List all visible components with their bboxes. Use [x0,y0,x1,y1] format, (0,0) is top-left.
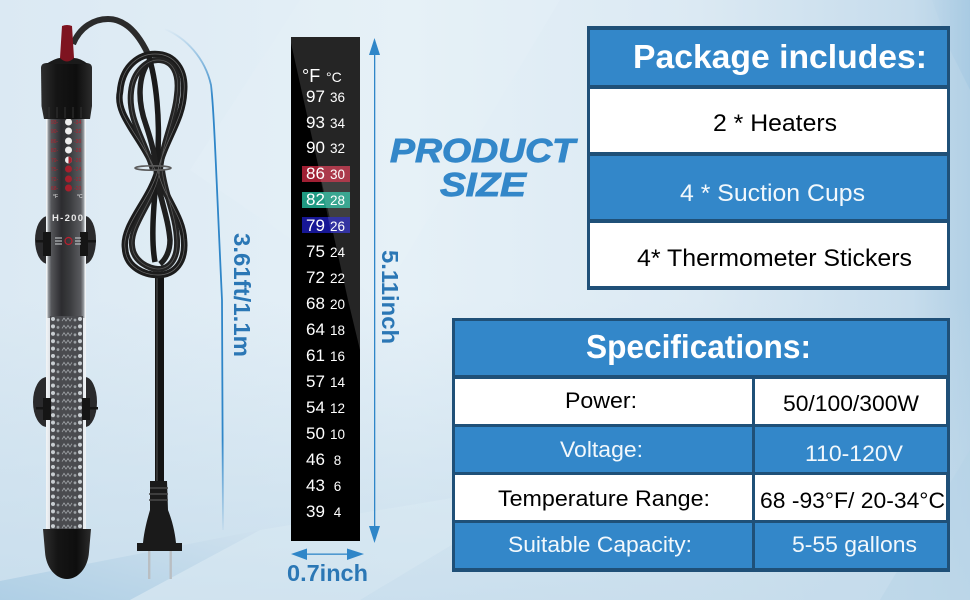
temperature scale: -28 [74,148,81,154]
heading: product size [390,132,578,203]
heater bottom cap [43,529,91,579]
celsius scale: 14 [330,375,345,390]
temperature scale: -20 [74,186,81,192]
fahrenheit scale: 54 [306,398,325,417]
aquarium heater [33,25,98,579]
heading: product size: PRODUCT [390,132,578,169]
sticker scale header: °F [302,66,320,86]
sticker scale header [302,66,342,86]
temperature knob [60,25,74,62]
fahrenheit scale: 86 [306,164,325,183]
specifications header row: Specifications: [586,328,811,365]
temperature scale: 86- [51,139,59,145]
temperature scale: -22 [74,177,81,183]
celsius scale: 4 [334,505,342,520]
specifications header row [455,321,947,375]
spec row: voltage: 110-120V [805,441,903,466]
temperature scale: °F [53,194,58,200]
package row: suction cups [590,156,947,219]
celsius scale: 12 [330,401,345,416]
arrow: sticker width [291,548,364,560]
package row: thermometer stickers [590,223,947,286]
icon: suction cups [33,216,97,427]
temperature scale: 90- [51,129,59,135]
fahrenheit scale: 46 [306,450,325,469]
fahrenheit scale: 39 [306,502,325,521]
spec row: voltage: Voltage: [560,437,643,462]
temperature scale: 68- [51,186,59,192]
temperature scale: -34 [74,120,81,126]
celsius scale: 20 [330,297,345,312]
celsius scale: 28 [330,193,345,208]
package row: suction cups: 4 * Suction Cups [680,180,865,207]
heater top cap [41,63,92,119]
fahrenheit scale: 82 [306,190,325,209]
fahrenheit scale: 72 [306,268,325,287]
temperature scale: 93- [51,120,59,126]
power cord and plug [73,19,184,579]
package header row [590,30,947,85]
spec row: temperature range [455,475,946,520]
package row: thermometer stickers: 4* Thermometer Stickers [637,245,912,272]
sticker scale header: °C [326,69,342,85]
temperature scale: 79- [51,158,59,164]
fahrenheit scale: 43 [306,476,325,495]
temperature scale: 72- [51,177,59,183]
fahrenheit scale: 79 [306,216,325,235]
fahrenheit scale: 68 [306,294,325,313]
sticker height label: 5.11inch [377,250,403,344]
fahrenheit scale: 90 [306,138,325,157]
temperature scale: °C [77,194,83,200]
spec row: voltage [455,427,947,472]
celsius scale: 8 [334,453,341,468]
temperature scale: -26 [74,158,81,164]
celsius scale: 30 [330,167,345,182]
celsius scale: 6 [334,479,341,494]
fahrenheit scale: 75 [306,242,325,261]
celsius scale: 32 [330,141,345,156]
panel: package includes [587,26,950,290]
temperature scale: -30 [74,139,81,145]
fahrenheit scale: 61 [306,346,325,365]
spec row: temperature range: Temperature Range: [498,486,710,511]
fahrenheit scale: 64 [306,320,325,339]
color bands [302,166,350,233]
fahrenheit scale: 57 [306,372,325,391]
spec row: suitable capacity: 5-55 gallons [792,532,917,557]
celsius scale: 26 [330,219,345,234]
temperature scale: -24 [74,167,81,173]
inner heater rod [48,118,84,318]
thermometer sticker [291,37,360,541]
temperature scale: 75- [51,167,59,173]
celsius scale: 16 [330,349,345,364]
package header row: Package includes: [633,38,927,75]
glass tube [46,118,86,530]
icon: suction clips [36,232,98,420]
celsius scale: 34 [330,116,345,131]
heating coil mesh [50,316,83,530]
celsius scale: 24 [330,245,345,260]
spec row: power [455,379,946,424]
fahrenheit scale [306,87,325,521]
fahrenheit scale: 97 [306,87,325,106]
arrow: sticker height [369,38,380,543]
curved cord length line [165,29,223,530]
model label: H-200 [52,213,83,224]
fahrenheit scale: 93 [306,113,325,132]
temperature scale: -32 [74,129,81,135]
temperature scale [51,118,83,200]
cord length label: 3.61ft/1.1m [229,233,255,357]
temperature scale: 82- [51,148,59,154]
panel: specifications [452,318,950,572]
heading: product size: SIZE [440,166,527,203]
celsius scale: 36 [330,90,345,105]
spec row: suitable capacity: Suitable Capacity: [508,532,692,557]
package row: heaters: 2 * Heaters [713,110,837,137]
celsius scale [330,90,345,520]
spec row: suitable capacity [455,523,947,568]
fahrenheit scale: 50 [306,424,325,443]
spec row: power: Power: [565,388,637,413]
spec row: power: 50/100/300W [783,391,920,416]
celsius scale: 18 [330,323,345,338]
celsius scale: 22 [330,271,345,286]
spec row: temperature range: 68 -93°F/ 20-34°C [760,488,945,513]
package row: heaters [590,89,947,152]
sticker width label: 0.7inch [287,560,368,586]
celsius scale: 10 [330,427,345,442]
